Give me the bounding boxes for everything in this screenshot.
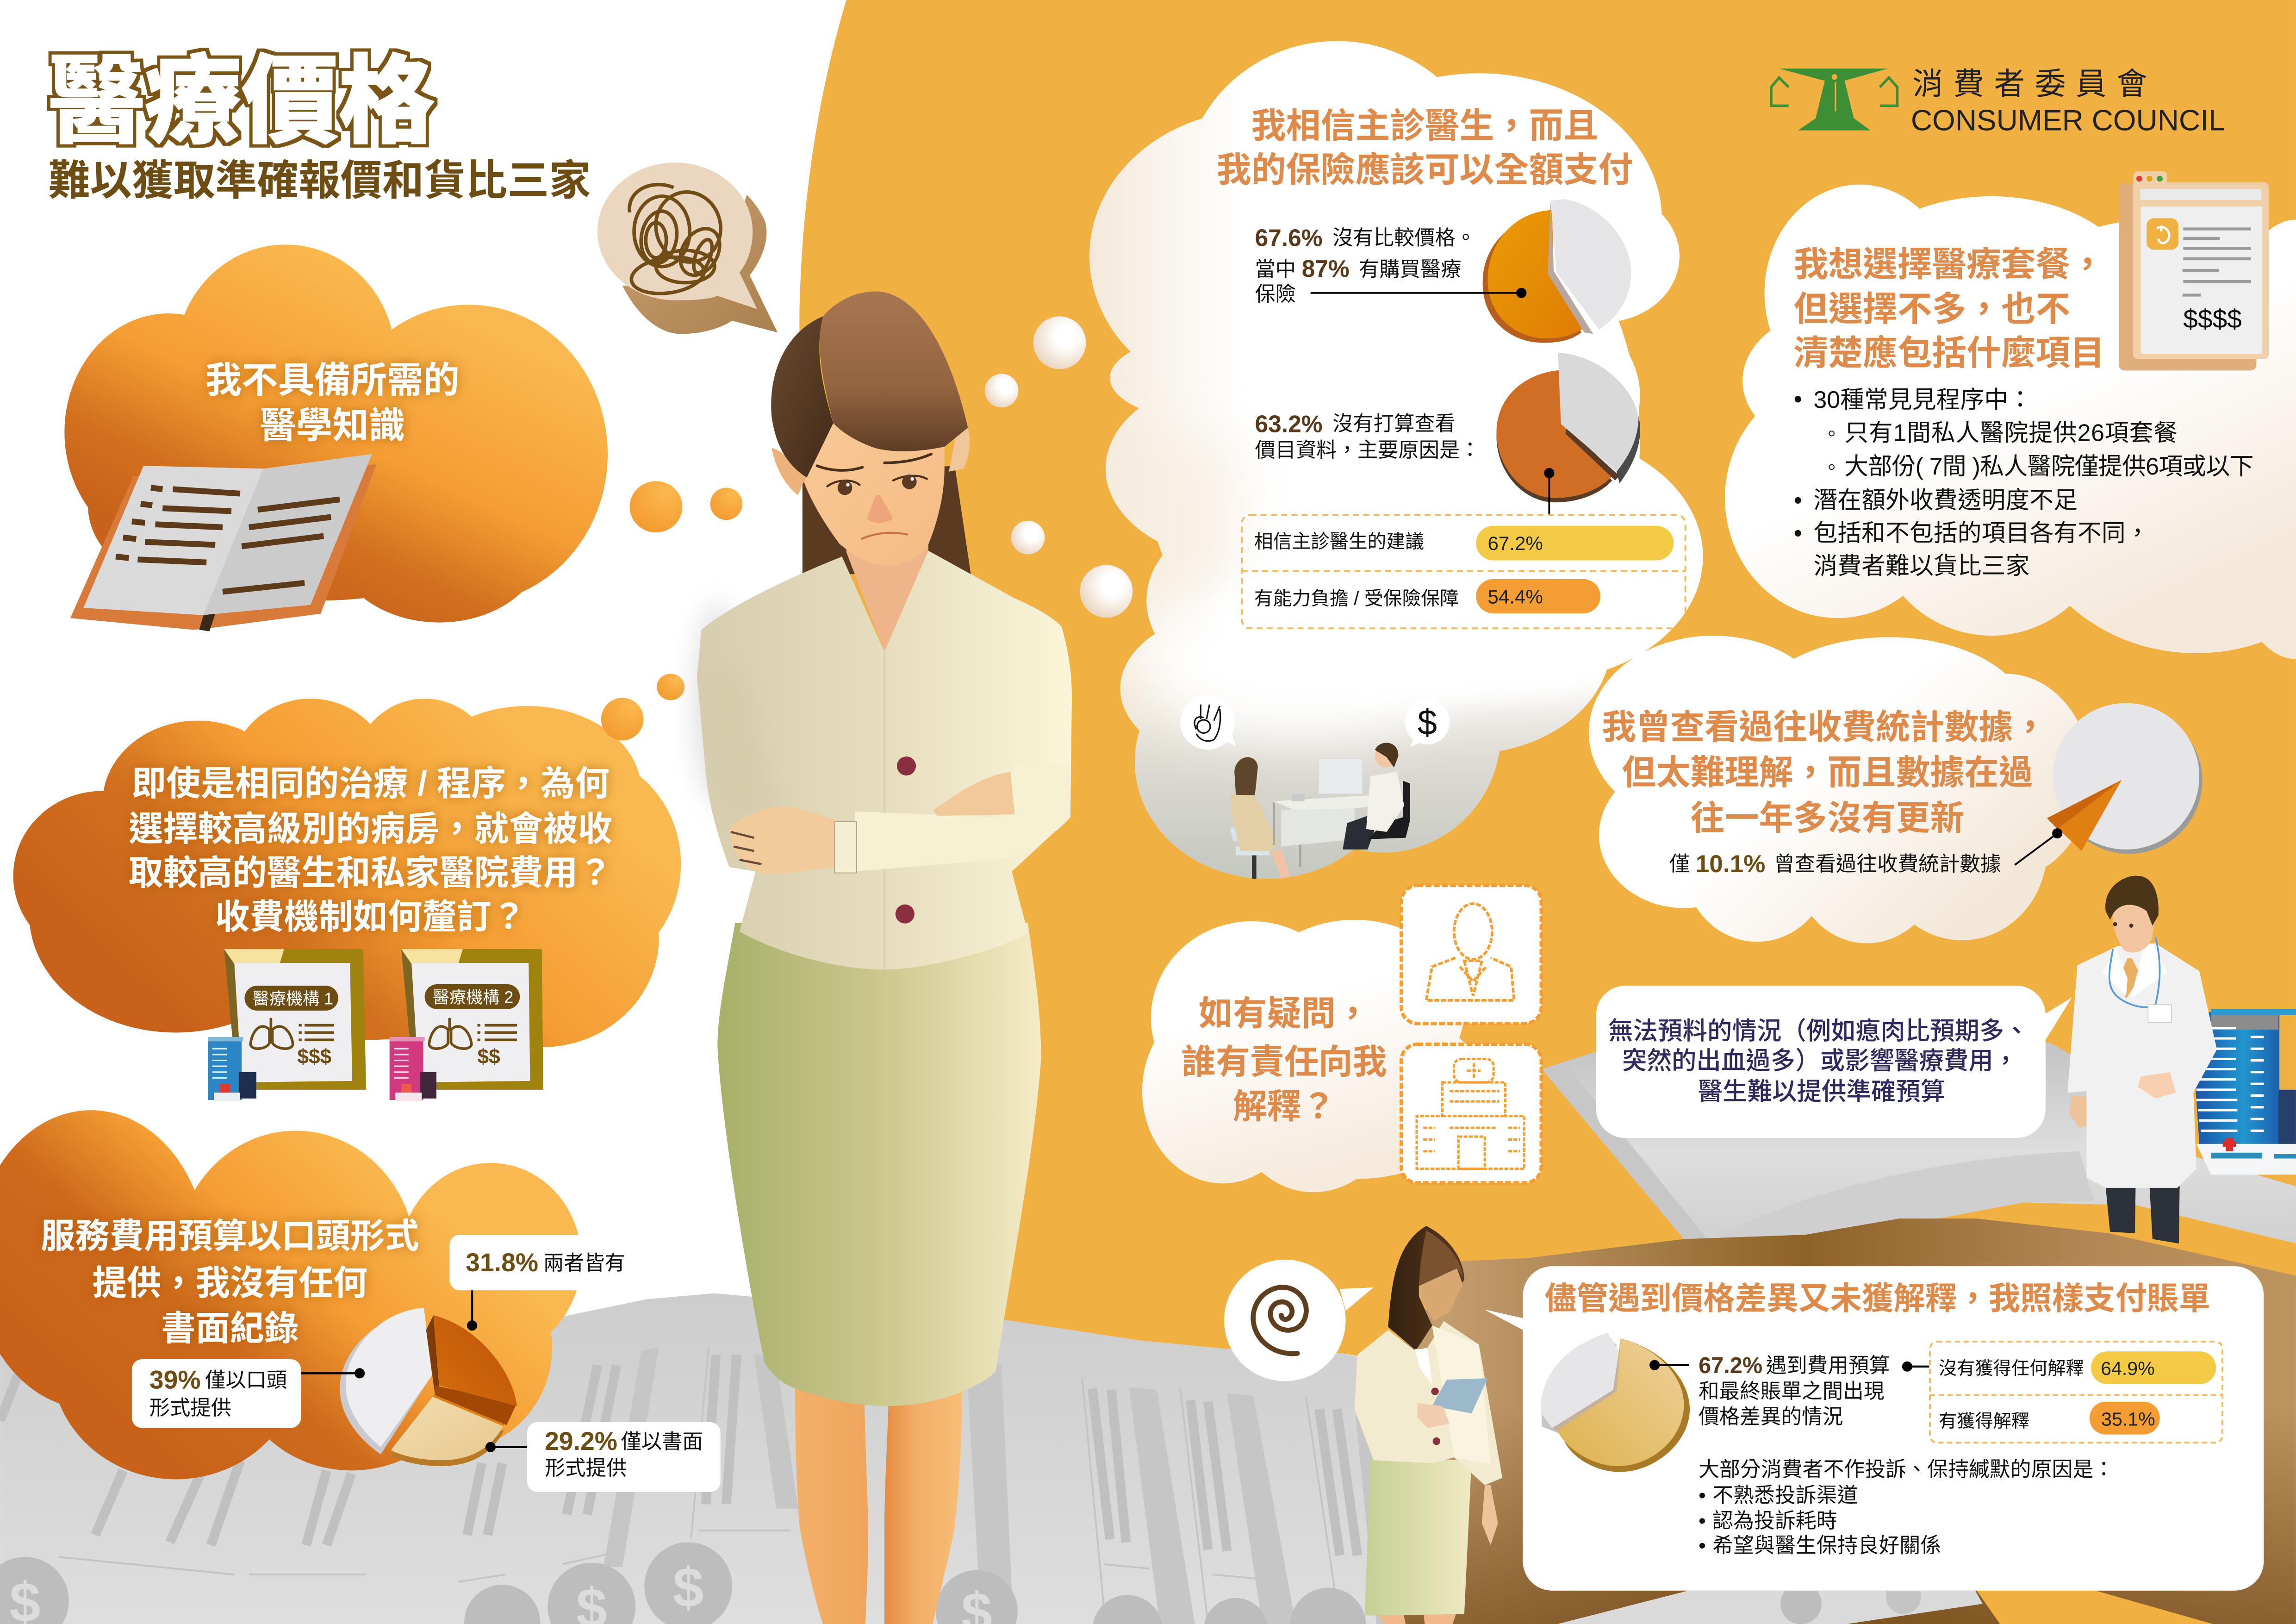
text: package facts list: • [1794,519,1802,546]
text: 63.2% no price information: 63.2% [1255,410,1323,437]
text: 67.2% price discrepancy: 和最終賬單之間出現 [1699,1380,1884,1403]
icon: spiral confusion bubble [1224,1260,1374,1381]
speech bubble and chart card [1484,1266,2264,1591]
grey shelves of price binders on floor: $ [673,1557,704,1619]
heading: 儘管遇到價格差異又未獲解釋，我照樣支付賬單 [1545,1280,2210,1316]
pie chart: budget format [340,1308,517,1466]
pie chart: 67.6% [1483,199,1631,343]
panel: pricing mechanism cloud [13,699,681,1101]
pie chart: 63.2% [1496,353,1640,502]
document: medical institution 2: $$ [477,1045,500,1068]
main figure: worried woman [691,291,1072,1624]
callout: 31.8% both: 兩者皆有 [543,1252,625,1274]
icon: browser price sheet [2119,171,2269,370]
speech bubble: doctor cannot give accurate estimate: 無法預料的情況（例如瘜肉比預期多、 [1608,1018,2029,1045]
pie chart: 10.1% [2047,703,2202,854]
text: reasons for not complaining: 不熟悉投訴渠道 [1712,1483,1858,1507]
bar chart: reasons: 67.2% [1487,532,1543,554]
logo: Consumer Council: 消費者委員會 [1912,67,2158,101]
text: package facts list: • [1794,487,1802,513]
heading: 我不具備所需的 [205,360,460,400]
document: medical institution 2: 醫療機構 2 [433,988,513,1007]
heading: 我想選擇醫療套餐， [1794,244,2105,283]
callout: 39% verbal only: 形式提供 [149,1397,231,1419]
callout: 29.2% written only: 僅以書面 [621,1430,703,1453]
text: reasons for not complaining [1699,1457,2114,1557]
icon: doctor in dashed card [1401,886,1541,1024]
callout: 31.8% both: 31.8% [466,1248,538,1277]
callout: 29.2% written only: 形式提供 [545,1457,627,1480]
bar chart: explanation received: 有獲得解釋 [1939,1411,2029,1431]
bar chart: reasons: 相信主診醫生的建議 [1254,531,1424,552]
panel: medical package cloud [1725,171,2296,659]
document: medical institution 1: $$$ [297,1045,331,1068]
panel: lack of medical knowledge cloud [64,244,608,631]
heading: 如有疑問， [1199,994,1370,1033]
heading: 選擇較高級別的病房，就會被收 [129,809,612,848]
bar chart: reasons: 54.4% [1487,586,1543,607]
heading: 醫學知識 [260,405,405,446]
heading: 我的保險應該可以全額支付 [1217,150,1633,189]
text: package facts list: 潛在額外收費透明度不足 [1813,487,2078,513]
heading: 書面紀錄 [161,1309,299,1348]
text: only 10.1%: 10.1% [1696,850,1765,878]
title: 醫療價格 [49,48,435,156]
heading: 但太難理解，而且數據在過 [1622,753,2033,792]
speech bubble: doctor cannot give accurate estimate: 醫生難以提供準確預算 [1698,1078,1945,1106]
text: reasons for not complaining: • [1699,1534,1706,1557]
callout: 39% verbal only: 僅以口頭 [205,1369,287,1392]
callout: 29.2% written only [485,1422,721,1492]
heading: 收費機制如何釐訂？ [215,897,526,936]
heading: 清楚應包括什麼項目 [1794,333,2105,372]
text: 67.6% no comparison: 67.6% [1255,225,1323,251]
panel: trust doctor and insurance cloud [1083,29,1713,893]
heading: 即使是相同的治療 / 程序，為何 [131,764,610,803]
bar chart: reasons [1242,515,1686,628]
speech bubble: doctor cannot give accurate estimate [1596,986,2072,1138]
text: package facts list: ◦ [1827,453,1836,480]
document: medical institution 1 [224,949,366,1090]
icon: browser price sheet: $$$$ [2183,305,2242,334]
text: only 10.1%: 僅 [1669,853,1690,875]
text: reasons for not complaining: 希望與醫生保持良好關係 [1712,1534,1941,1557]
heading [41,1217,419,1348]
text: 63.2% no price information: 價目資料，主要原因是： [1255,439,1481,462]
pie chart: 67.2% [1541,1333,1690,1472]
text: 67.2% price discrepancy: 價格差異的情況 [1699,1405,1843,1428]
text: 63.2% no price information [1255,410,1554,516]
heading: 服務費用預算以口頭形式 [41,1217,419,1255]
text: 63.2% no price information: 沒有打算查看 [1332,412,1456,435]
figure: woman reading tablet [1353,1226,1502,1624]
illustration: doctor and hospital [2067,876,2296,1243]
bottom binder fragment and orange wedge [1556,1579,2214,1624]
callout: 39% verbal only [132,1359,365,1428]
text: reasons for not complaining: • [1699,1483,1706,1507]
callout: 39% verbal only: 39% [149,1365,201,1394]
callout: 31.8% both [449,1235,644,1330]
icon: dollar bubble [1405,700,1450,747]
heading [129,764,612,936]
text: package facts list: 30種常見見程序中： [1813,386,2032,413]
icon: OK hand bubble [1180,695,1236,750]
bar chart: explanation received: 35.1% [2101,1408,2155,1430]
text: reasons for not complaining: 認為投訴耗時 [1712,1509,1837,1532]
icon: blue hospital [208,1037,256,1101]
heading: 誰有責任向我 [1182,1043,1387,1081]
text: 67.2% price discrepancy: 67.2% [1699,1353,1762,1378]
bar chart: reasons: 有能力負擔 / 受保險保障 [1254,588,1459,609]
heading: 我相信主診醫生，而且 [1251,106,1598,145]
text: 67.2% price discrepancy [1649,1353,1929,1428]
heading [1217,106,1633,189]
text: reasons for not complaining: 大部分消費者不作投訴、保持緘默的原因是： [1699,1457,2114,1481]
speech bubble: doctor cannot give accurate estimate: 突然的出血過多）或影響醫療費用， [1622,1048,2018,1075]
subtitle: 難以獲取準確報價和貨比三家 [49,157,591,204]
heading: 提供，我沒有任何 [92,1264,367,1302]
document: medical institution 2 [401,949,543,1090]
panel: verbal budget cloud [0,1110,721,1492]
panel: who is responsible cloud [1142,886,1541,1192]
text: 67.6% no comparison: 有購買醫療 [1359,258,1461,281]
icon: open book [70,454,376,631]
heading: 但選擇不多，也不 [1794,289,2070,328]
panel: historical fee statistics cloud [1589,636,2202,943]
text: package facts list: 包括和不包括的項目各有不同， [1813,519,2150,546]
heading: 我曾查看過往收費統計數據， [1602,708,2047,746]
text: package facts list [1794,386,2253,579]
grey counter and hill behind doctor [1542,1043,2296,1248]
text: package facts list: 大部份( 7間 )私人醫院僅提供6項或以下 [1844,453,2253,480]
text: package facts list: ◦ [1827,419,1836,446]
logo: Consumer Council [1771,67,2225,137]
document: medical institution 1: 醫療機構 1 [253,989,333,1008]
icon: hospital in dashed card [1401,1044,1541,1183]
grey shelves of price binders on floor [0,1293,1391,1624]
orange band and brown hill [1384,1202,2296,1624]
text: package facts list: • [1794,386,1802,412]
text: 67.6% no comparison: 當中 [1255,258,1296,281]
heading [1182,994,1387,1126]
icon: hospital building [2190,1009,2296,1174]
text: package facts list: 只有1間私人醫院提供26項套餐 [1844,419,2178,446]
icon: scribble speech bubble [597,162,778,334]
text: 67.6% no comparison: 保險 [1255,283,1296,306]
heading [205,360,460,446]
bar chart: explanation received: 沒有獲得任何解釋 [1939,1358,2084,1379]
heading: 取較高的醫生和私家醫院費用？ [129,853,612,892]
text: 67.6% no comparison [1255,225,1526,306]
text: 67.2% price discrepancy: 遇到費用預算 [1766,1354,1890,1377]
heading [1602,708,2047,837]
bar chart: explanation received [1930,1342,2222,1443]
text: package facts list: 消費者難以貨比三家 [1813,552,2029,579]
callout: 29.2% written only: 29.2% [545,1427,617,1455]
bar chart: explanation received: 64.9% [2101,1358,2155,1379]
thought dots: orange [601,481,742,740]
thought dots: pearl [985,316,1132,618]
text: only 10.1%: 曾查看過往收費統計數據 [1774,853,2001,875]
text: 67.6% no comparison: 沒有比較價格。 [1332,226,1476,249]
heading [1794,244,2105,372]
icon: dollar bubble: $ [1418,703,1437,743]
icon: pink hospital [390,1037,436,1101]
logo: Consumer Council: CONSUMER COUNCIL [1911,105,2225,137]
heading: 解釋？ [1233,1087,1336,1126]
text: 67.6% no comparison: 87% [1302,255,1350,282]
text: only 10.1% [1669,828,2062,878]
panel: paying the bill [1484,1266,2264,1591]
text: reasons for not complaining: • [1699,1509,1706,1532]
heading: 往一年多沒有更新 [1690,799,1965,837]
illustration: consultation with doctor [1180,695,1450,879]
